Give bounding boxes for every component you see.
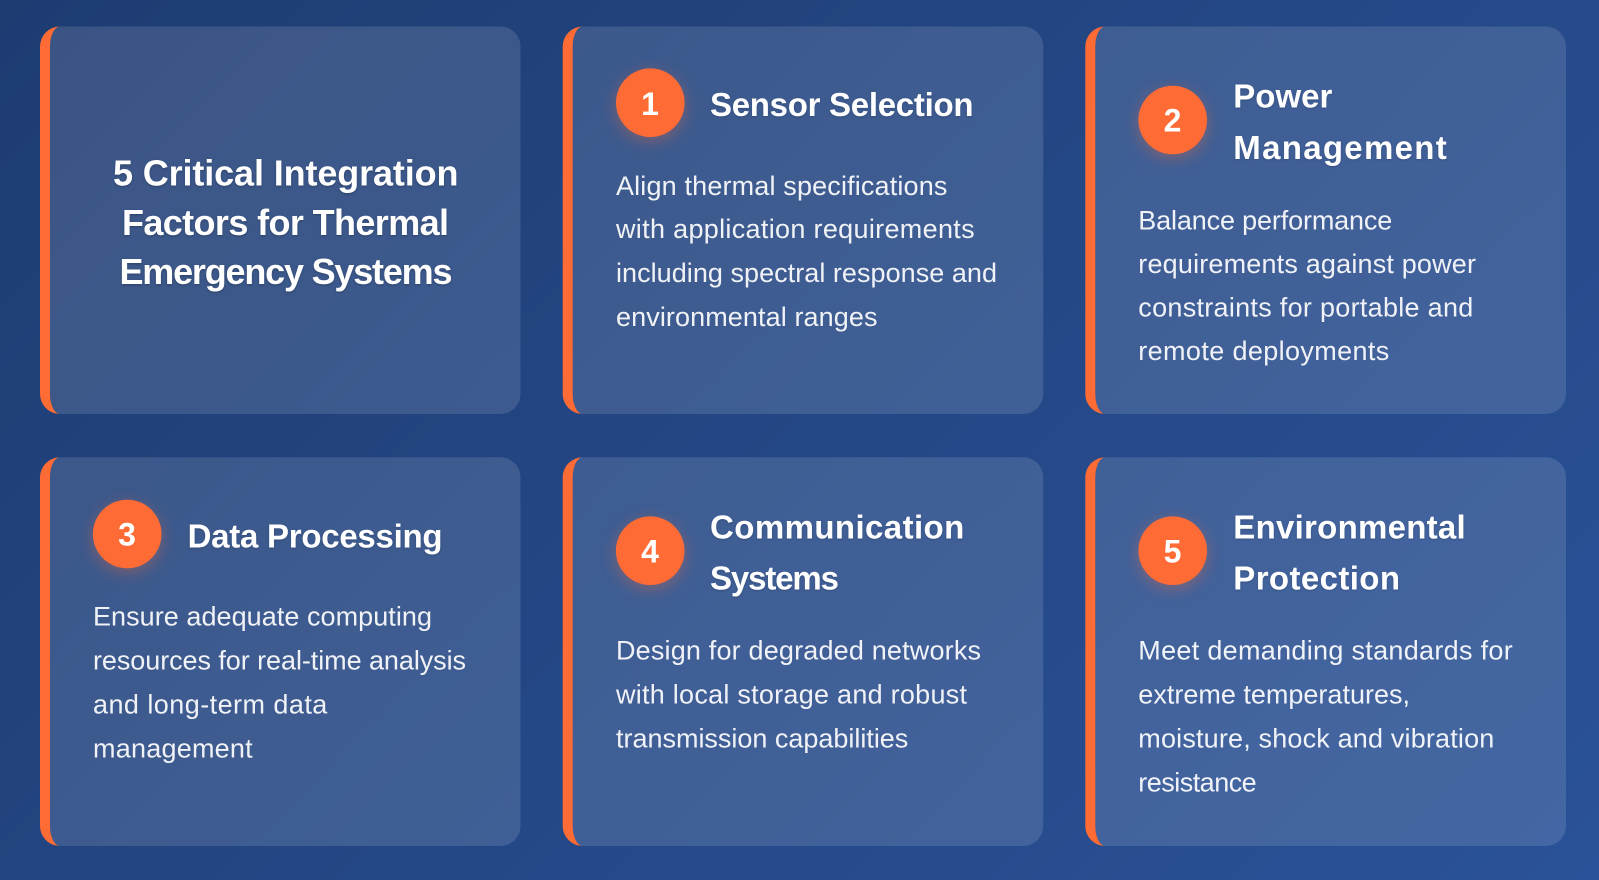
text block: communication systems description: Design for degraded networks bbox=[616, 636, 981, 666]
panel: title card bbox=[40, 26, 520, 414]
icon: number badge 5 bbox=[1138, 516, 1207, 585]
icon: number badge 3: 3 bbox=[118, 517, 136, 553]
text block: environmental protection description: moisture, shock and vibration bbox=[1138, 723, 1494, 753]
text block: communication systems description: transmission capabilities bbox=[616, 723, 908, 753]
icon: number badge 3 bbox=[93, 500, 162, 568]
heading: communication systems: Communication bbox=[710, 508, 964, 545]
heading: main title: 5 Critical Integration bbox=[113, 153, 458, 194]
text block: environmental protection description: Meet demanding standards for bbox=[1138, 636, 1513, 666]
text block: sensor selection description: Align thermal specifications bbox=[616, 171, 947, 201]
icon: number badge 1: 1 bbox=[641, 86, 659, 122]
text block: sensor selection description: with application requirements bbox=[615, 214, 975, 244]
heading: main title: Factors for Thermal bbox=[122, 202, 449, 243]
panel: environmental protection bbox=[1085, 457, 1566, 846]
text block: power management description: Balance performance bbox=[1138, 206, 1392, 236]
panel: sensor selection bbox=[563, 26, 1043, 414]
text block: communication systems description bbox=[615, 636, 981, 753]
icon: number badge 1 bbox=[616, 68, 685, 137]
text block: environmental protection description bbox=[1138, 636, 1513, 797]
text block: sensor selection description: environmental ranges bbox=[616, 302, 878, 332]
text block: power management description: requirements against power bbox=[1138, 249, 1476, 279]
text block: environmental protection description: resistance bbox=[1138, 767, 1257, 797]
heading: data processing: Data Processing bbox=[188, 518, 443, 555]
icon: number badge 2 bbox=[1138, 86, 1207, 154]
text block: sensor selection description bbox=[615, 171, 997, 332]
panel: data processing bbox=[40, 457, 520, 846]
heading: environmental protection: Protection bbox=[1233, 559, 1400, 596]
heading: main title bbox=[113, 153, 458, 292]
heading: main title: Emergency Systems bbox=[120, 251, 452, 292]
heading: power management: Management bbox=[1233, 129, 1447, 166]
text block: data processing description: Ensure adequate computing bbox=[93, 602, 432, 632]
text block: data processing description: and long-term data bbox=[93, 690, 328, 720]
panel: communication systems bbox=[563, 457, 1043, 846]
heading: sensor selection: Sensor Selection bbox=[710, 86, 974, 123]
text block: data processing description: management bbox=[93, 734, 253, 764]
text block: sensor selection description: including spectral response and bbox=[616, 258, 997, 288]
icon: number badge 4: 4 bbox=[641, 534, 659, 570]
text block: power management description bbox=[1138, 206, 1476, 366]
heading: environmental protection bbox=[1233, 508, 1466, 596]
heading: environmental protection: Environmental bbox=[1233, 508, 1466, 545]
heading: communication systems bbox=[710, 508, 964, 596]
icon: number badge 5: 5 bbox=[1164, 534, 1181, 570]
heading: communication systems: Systems bbox=[710, 559, 839, 596]
text block: communication systems description: with local storage and robust bbox=[615, 680, 967, 710]
icon: number badge 2: 2 bbox=[1164, 103, 1181, 139]
heading: power management: Power bbox=[1233, 78, 1332, 114]
text block: data processing description bbox=[93, 602, 466, 764]
heading: power management bbox=[1233, 78, 1447, 166]
text block: data processing description: resources for real-time analysis bbox=[93, 646, 466, 676]
panel: power management bbox=[1085, 26, 1566, 414]
icon: number badge 4 bbox=[616, 516, 684, 585]
text block: environmental protection description: extreme temperatures, bbox=[1138, 680, 1410, 710]
text block: power management description: remote deployments bbox=[1138, 336, 1389, 366]
text block: power management description: constraints for portable and bbox=[1138, 292, 1473, 322]
